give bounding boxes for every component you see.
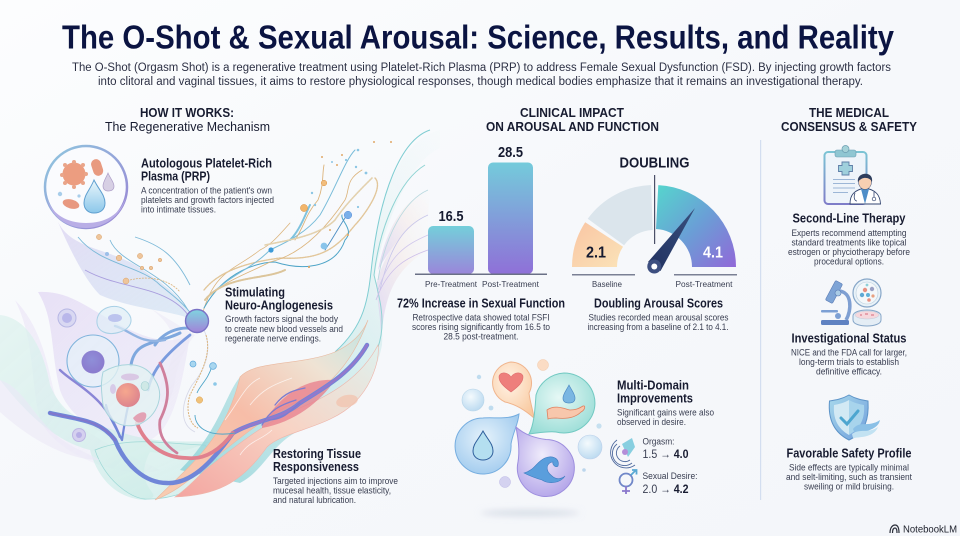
text: second-line therapy: estrogen or phyciotherapy before [788,247,910,257]
icon: gender symbols [620,470,636,494]
text: stimulating neuro-angiogenesis: to create new blood vessels and [225,324,343,334]
gauge: arousal scores: Baseline [592,279,622,289]
text: restoring tissue responsiveness: Targeted injections aim to improve [273,476,398,486]
stat: sexual desire: 2.0 → 4.2 [642,482,689,496]
particles [96,234,162,284]
text: 72% increase [397,295,565,342]
bar chart: FSFI scores: Post-Treatment [482,279,540,289]
text: investigational status [791,330,907,376]
text: autologous PRP: Autologous Platelet-Rich [141,156,272,170]
text: investigational status: Investigational Status [792,330,906,345]
text: restoring tissue responsiveness: Responsiveness [273,459,359,474]
text: multi-domain improvements: observed in desire. [617,417,686,427]
text: 72% increase: 72% Increase in Sexual Function [397,295,565,310]
icon: PRP circle [45,146,127,228]
heading: how it works: The Regenerative Mechanism [105,119,270,134]
text: doubling arousal scores: Doubling Arousal Scores [594,295,723,310]
gauge: arousal scores: 2.1 [586,244,606,262]
text: stimulating neuro-angiogenesis [225,284,343,344]
text: autologous PRP: A concentration of the patient's own [141,186,272,196]
PRP tail flowing to node [58,222,194,320]
subtitle: into clitoral and vaginal tissues, it aims to restore physiological responses, though medical bodies emphasize that it remains an investigational therapy. [98,76,863,88]
text: autologous PRP: into intimate tissues. [141,204,216,214]
subtitle [72,62,891,88]
heading: clinical impact [486,105,659,134]
text: multi-domain improvements: Improvements [617,390,693,406]
background ribbons [0,292,225,500]
heading: medical consensus: CONSENSUS & SAFETY [781,119,917,134]
text: multi-domain improvements: Significant gains were also [617,408,714,418]
growth factor streams [203,150,377,312]
heading: clinical impact: ON AROUSAL AND FUNCTION [486,119,659,134]
icon: clipboard and doctor [824,146,880,204]
gauge: arousal scores [572,154,737,289]
text: multi-domain improvements [617,378,714,496]
text: favorable safety profile: Favorable Safety Profile [786,445,912,460]
text: second-line therapy: Second-Line Therapy [792,211,906,226]
icon: microscope and petri dishes [821,279,881,326]
icon group: multi-domain bubbles [455,360,602,516]
text: restoring tissue responsiveness: Restoring Tissue [273,446,361,461]
text: favorable safety profile: and selt-limiting, such as transient [786,472,912,482]
text: doubling arousal scores: Studies recorded mean arousal scores [588,312,729,322]
text: 72% increase: 28.5 post-treatment. [444,332,518,342]
vessels [50,326,367,483]
text: multi-domain improvements: Multi-Domain [617,378,689,392]
text: autologous PRP: platelets and growth factors injected [141,195,274,205]
text: stimulating neuro-angiogenesis: Stimulating [225,284,285,300]
bar chart: FSFI scores: 16.5 [438,209,464,225]
text: second-line therapy: Experts recommend attempting [792,228,906,238]
subtitle: The O-Shot (Orgasm Shot) is a regenerative treatment using Platelet-Rich Plasma (PRP) to address Female Sexual Dysfunction (FSD). By injecting growth factors [72,62,891,74]
bar chart: FSFI scores: Pre-Treatment [425,279,478,289]
text: restoring tissue responsiveness: and natural lubrication. [273,495,356,505]
gauge: arousal scores: DOUBLING [620,154,690,172]
node [186,310,208,332]
heading: how it works: HOW IT WORKS: [140,105,234,120]
stat: orgasm [642,437,689,461]
text: stimulating neuro-angiogenesis: Neuro-Anglogenesis [225,298,333,312]
gauge: arousal scores: Post-Treatment [676,279,733,289]
text: restoring tissue responsiveness: mucesal health, tissue elasticity, [273,486,391,496]
text: 72% increase: Retrospective data showed total FSFI [412,312,550,322]
stat: sexual desire: Sexual Desire: [642,471,698,481]
text: autologous PRP [141,156,274,214]
text: investigational status: long-term trials to establish [799,357,899,367]
heading: how it works [105,105,270,134]
bar chart: FSFI scores [415,145,547,289]
text: favorable safety profile: sweiling or mild bruising. [804,482,894,492]
heading: medical consensus [781,105,917,134]
text: 72% increase: scores rising significantly from 16.5 to [412,322,550,332]
text: second-line therapy: procedural options. [814,256,884,266]
text: investigational status: NICE and the FDA call for larger, [791,348,907,358]
divider [760,140,761,500]
bar chart: FSFI scores: 28.5 [498,145,523,161]
illustration: regenerative flow ribbons and cells [0,130,440,500]
text: doubling arousal scores: increasing from a baseline of 2.1 to 4.1. [588,322,728,332]
heading: medical consensus: THE MEDICAL [809,105,889,120]
text: doubling arousal scores [588,295,729,332]
text: autologous PRP: Plasma (PRP) [141,168,210,184]
text: investigational status: definitive efficacy. [816,366,882,376]
logo: NotebookLM: NotebookLM [903,524,957,536]
text: stimulating neuro-angiogenesis: regenerate nerve endings. [225,334,321,344]
heading: clinical impact: CLINICAL IMPACT [520,105,624,120]
stat: orgasm: 1.5 → 4.0 [642,447,689,461]
stat: orgasm: Orgasm: [642,437,674,447]
text: favorable safety profile [786,445,912,492]
icon: shield with check and waves [829,395,880,440]
cells [58,306,160,442]
tissue and fan ribbons [155,130,440,500]
gauge: arousal scores: 4.1 [703,244,723,262]
text: second-line therapy [788,211,910,266]
text: stimulating neuro-angiogenesis: Growth factors signal the body [225,314,338,324]
icon: orgasm signal [611,438,635,468]
text: second-line therapy: standard treatments like topical [792,238,906,248]
text: favorable safety profile: Side effects are typically minimal [789,462,909,472]
text: restoring tissue responsiveness [273,446,398,505]
stat: sexual desire [642,471,698,496]
curves beside node [183,330,235,434]
